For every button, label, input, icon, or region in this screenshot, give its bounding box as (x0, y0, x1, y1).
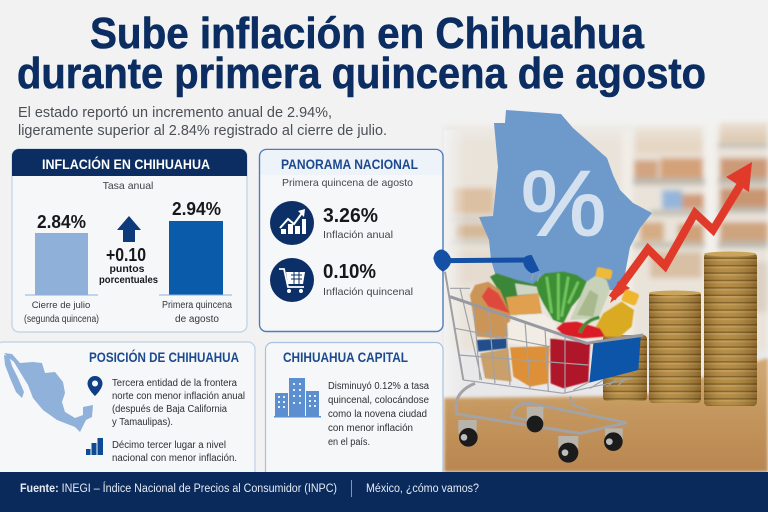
bar: cierre de julio (24, 211, 99, 325)
heading: POSICIÓN DE CHIHUAHUA (89, 348, 239, 365)
icon: bars (86, 438, 103, 455)
panel header (260, 150, 442, 175)
title: Sube inflación en Chihuahua (90, 9, 644, 58)
footer (0, 472, 768, 512)
handle (433, 249, 539, 273)
text: disminuyó: con menor inflación (328, 423, 413, 434)
basket rim (450, 297, 643, 343)
icon: shopping cart (270, 258, 314, 302)
groceries (470, 267, 640, 388)
bar: primera quincena de agosto (159, 198, 232, 325)
subtitle: El estado reportó un incremento anual de 2.94%, (18, 105, 332, 121)
text: disminuyó: Disminuyó 0.12% a tasa (328, 381, 429, 392)
stat: inflación quincenal (270, 258, 413, 302)
panel: inflación en Chihuahua (12, 149, 247, 332)
subtitle (18, 105, 387, 139)
shopping cart with groceries (433, 249, 643, 463)
panel: Chihuahua capital (266, 342, 443, 478)
basket wires (450, 273, 632, 393)
icon: up arrow (117, 216, 141, 242)
stat: inflación anual: 3.26% (323, 205, 378, 227)
text: tercera entidad: Tercera entidad de la frontera (112, 378, 237, 389)
wheels (458, 407, 623, 463)
text: décimo tercer lugar (112, 440, 237, 464)
text: tercera entidad: y Tamaulipas). (112, 417, 173, 428)
gold coin stacks (603, 252, 757, 406)
callout: +0.10 puntos porcentuales: +0.10 (106, 245, 146, 265)
callout: +0.10 puntos porcentuales (99, 245, 158, 286)
front blue panel (589, 337, 641, 383)
bar: cierre de julio: (segunda quincena) (24, 314, 99, 325)
panel: panorama nacional (260, 150, 443, 332)
title: durante primera quincena de agosto (17, 49, 706, 98)
text: disminuyó: quincenal, colocándose (328, 395, 429, 406)
basket left post (445, 272, 463, 380)
Chihuahua state silhouette with percent sign (479, 110, 652, 290)
stat: inflación anual (270, 201, 393, 245)
callout: +0.10 puntos porcentuales: puntos (110, 263, 145, 275)
text: disminuyó (328, 381, 429, 448)
photo: wooden table (444, 358, 768, 472)
title (17, 9, 706, 98)
text: tercera entidad: norte con menor inflación anual (112, 391, 245, 402)
bar: primera quincena de agosto: 2.94% (172, 198, 221, 219)
source text: Fuente: INEGI – Índice Nacional de Precios al Consumidor (INPC) (20, 482, 337, 495)
panel header: INFLACIÓN EN CHIHUAHUA (42, 155, 210, 172)
icon: rising chart (270, 201, 314, 245)
chassis (456, 383, 627, 433)
callout: +0.10 puntos porcentuales: porcentuales (99, 274, 158, 286)
bar: cierre de julio: 2.84% (37, 211, 86, 232)
subtitle: tasa anual: Tasa anual (103, 180, 153, 192)
credit text: México, ¿cómo vamos? (366, 483, 479, 495)
bar: primera quincena de agosto: de agosto (175, 314, 219, 325)
map of Mexico (4, 353, 93, 432)
text: décimo tercer lugar: nacional con menor inflación. (112, 453, 237, 464)
stat: inflación quincenal: Inflación quincenal (323, 286, 413, 298)
bar: primera quincena de agosto: Primera quincena (162, 300, 232, 311)
subheading: Primera quincena de agosto (282, 177, 413, 189)
text: tercera entidad: (después de Baja California (112, 404, 227, 415)
icon: location pin (88, 376, 102, 396)
panel header: PANORAMA NACIONAL (281, 156, 418, 172)
text: disminuyó: en el país. (328, 437, 370, 448)
Chihuahua state silhouette with percent sign: % (521, 153, 606, 255)
subtitle: ligeramente superior al 2.84% registrado al cierre de julio. (18, 123, 387, 139)
red rising arrow (610, 162, 752, 303)
stat: inflación anual: Inflación anual (323, 229, 393, 241)
heading: CHIHUAHUA CAPITAL (283, 349, 408, 365)
bar: cierre de julio: Cierre de julio (32, 300, 90, 311)
text: disminuyó: como la novena ciudad (328, 409, 427, 420)
text: décimo tercer lugar: Décimo tercer lugar a nivel (112, 440, 226, 451)
panel header (12, 149, 247, 176)
icon: buildings (274, 378, 321, 418)
stat: inflación quincenal: 0.10% (323, 261, 376, 283)
panel: posición de Chihuahua (0, 342, 255, 478)
text: tercera entidad (112, 378, 245, 428)
photo: blurred supermarket shelves (444, 108, 768, 400)
